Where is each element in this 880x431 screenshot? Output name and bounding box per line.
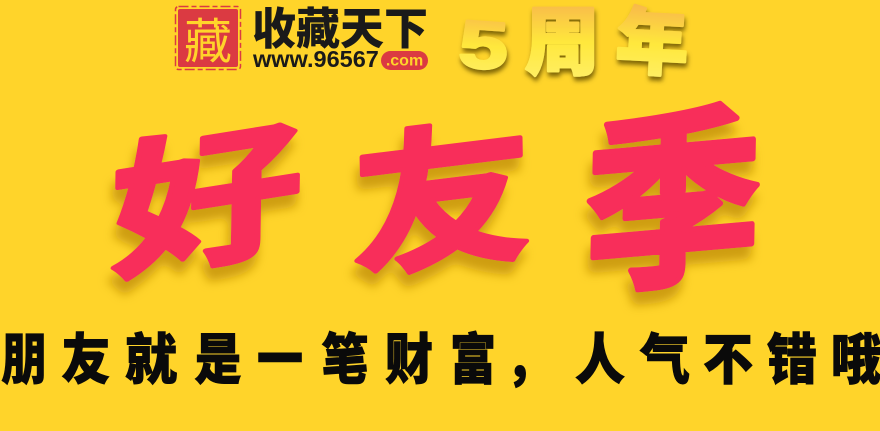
slogan: 朋友就是一笔财富，人气不错哦: ， <box>506 329 552 391</box>
slogan: 朋友就是一笔财富，人气不错哦: 气 <box>640 330 690 392</box>
slogan: 朋友就是一笔财富，人气不错哦 <box>2 329 880 392</box>
slogan: 朋友就是一笔财富，人气不错哦: 哦 <box>831 330 880 392</box>
logo url: www.96567 <box>252 46 379 72</box>
slogan: 朋友就是一笔财富，人气不错哦: 人 <box>575 330 625 392</box>
title char 季: 季 <box>582 90 764 319</box>
slogan: 朋友就是一笔财富，人气不错哦: 朋 <box>2 330 46 391</box>
heading char 5: 5 <box>457 7 510 84</box>
slogan: 朋友就是一笔财富，人气不错哦: 友 <box>62 330 110 392</box>
logo: 收藏天下 96567.com <box>176 2 428 72</box>
logo wordmark: 收藏天下 <box>252 5 428 54</box>
title char 友: 友 <box>350 105 534 299</box>
heading char 年: 年 <box>614 2 690 86</box>
slogan: 朋友就是一笔财富，人气不错哦: 就 <box>125 331 177 391</box>
slogan: 朋友就是一笔财富，人气不错哦: 不 <box>703 330 753 392</box>
logo .com badge: .com <box>386 52 423 70</box>
title: 好友季 <box>110 90 764 319</box>
slogan: 朋友就是一笔财富，人气不错哦: 错 <box>767 330 817 392</box>
heading char 周: 周 <box>525 1 599 84</box>
slogan: 朋友就是一笔财富，人气不错哦: 是 <box>195 330 241 391</box>
slogan: 朋友就是一笔财富，人气不错哦: 笔 <box>322 330 368 391</box>
slogan: 朋友就是一笔财富，人气不错哦: 富 <box>450 329 496 391</box>
heading: 5周年 <box>457 1 690 86</box>
slogan: 朋友就是一笔财富，人气不错哦: 一 <box>257 329 303 391</box>
icon: red seal: 藏 <box>184 2 232 72</box>
title char 好: 好 <box>110 105 304 301</box>
slogan: 朋友就是一笔财富，人气不错哦: 财 <box>385 329 433 391</box>
